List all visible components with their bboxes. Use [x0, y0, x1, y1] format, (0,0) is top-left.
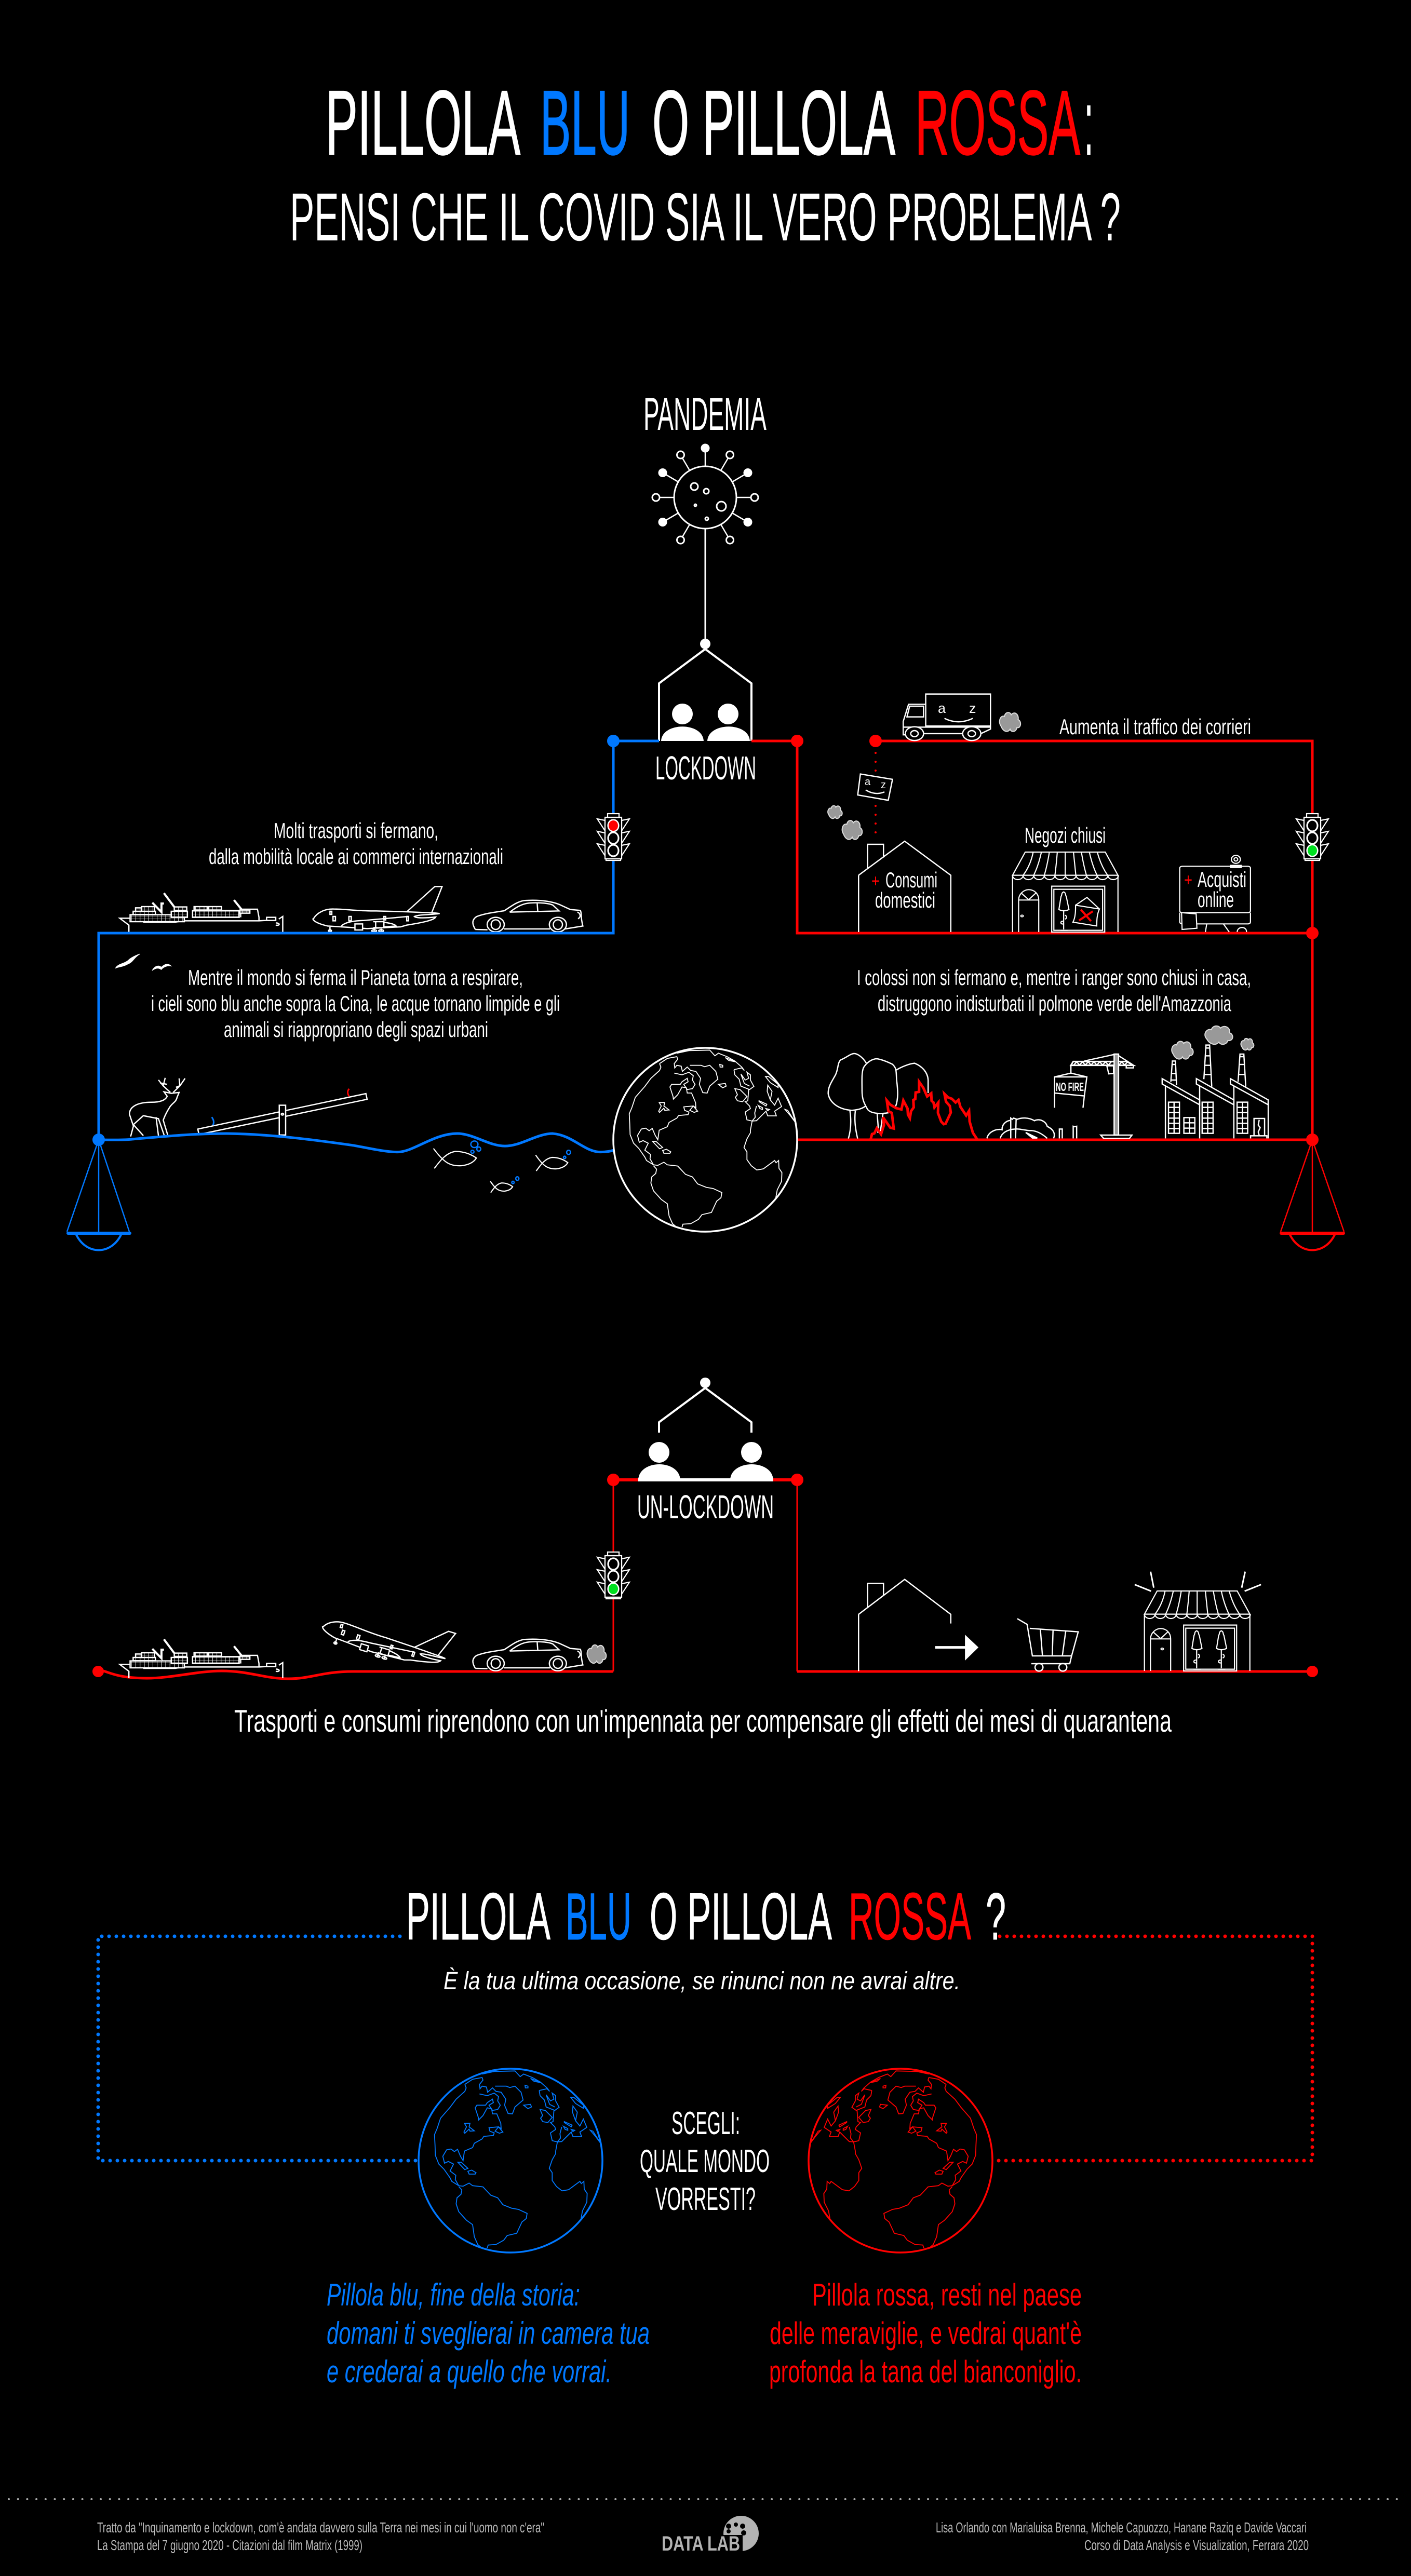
text: colossi: distruggono indisturbati il polmone verde dell'Amazzonia — [878, 991, 1231, 1016]
heading: blue or red pill: PILLOLA — [406, 1880, 550, 1954]
icon: house with arrow — [858, 1580, 977, 1671]
title: O PILLOLA — [652, 72, 895, 174]
icon: bush and stumps — [987, 1118, 1077, 1138]
icon: red scale — [1281, 1140, 1344, 1250]
title — [326, 72, 1093, 174]
icon: factories — [1162, 1026, 1268, 1138]
footer: source: Tratto da "Inquinamento e lockdown, com'è andata davvero sulla Terra nei mesi in cui l'uomo non c'era" — [97, 2519, 544, 2535]
text: couriers: Aumenta il traffico dei corrieri — [1059, 714, 1251, 739]
text: home consumption: + — [871, 871, 880, 891]
text: home consumption: Consumi — [885, 868, 937, 892]
text: home consumption — [871, 868, 937, 912]
text: transports — [209, 818, 503, 869]
text: colossi — [857, 965, 1251, 1016]
icon: birds — [115, 954, 171, 970]
icon: lockdown house with people — [659, 639, 751, 741]
fire — [871, 1082, 977, 1139]
connector: virus to house — [704, 529, 706, 644]
icon: closed shop — [1013, 852, 1119, 932]
text: transports: dalla mobilità locale ai commerci internazionali — [209, 844, 503, 869]
text: red pill: profonda la tana del bianconiglio. — [769, 2354, 1082, 2389]
footer: logo: DATA LAB — [662, 2532, 740, 2555]
traffic light: green — [597, 1552, 629, 1599]
icons: house smoke — [828, 806, 862, 840]
heading: blue or red pill — [406, 1880, 1006, 1954]
icon: house — [858, 841, 951, 932]
icon: computer — [1180, 855, 1251, 932]
icon: fish — [434, 1141, 571, 1193]
heading: un-lockdown: UN-LOCKDOWN — [637, 1488, 774, 1526]
text: planet breathes: Mentre il mondo si ferma il Pianeta torna a respirare, — [188, 965, 523, 990]
text: red pill: Pillola rossa, resti nel paese — [812, 2277, 1082, 2312]
blue water line — [103, 1134, 614, 1193]
icon: delivery truck — [903, 694, 990, 740]
text: online purchases: online — [1198, 887, 1234, 912]
traffic light: green — [1296, 814, 1328, 860]
icon: burning trees — [828, 1054, 977, 1139]
title: BLU — [540, 72, 630, 174]
text: red pill — [769, 2277, 1082, 2389]
icon: package — [858, 774, 893, 800]
icons: transports restart — [120, 1596, 606, 1678]
title: PILLOLA — [326, 72, 520, 174]
icon: seesaw — [198, 1089, 367, 1135]
text: blue pill: domani ti sveglierai in camera tua — [327, 2316, 650, 2351]
text: shops closed: Negozi chiusi — [1025, 823, 1106, 847]
icon: truck smoke — [1000, 712, 1020, 732]
icon: red earth mirrored — [809, 2069, 992, 2253]
icon: cart — [1017, 1619, 1078, 1671]
icon: no fire sign and crane: NO FIRE — [1056, 1080, 1084, 1094]
text: planet breathes: animali si riappropriano degli spazi urbani — [224, 1017, 488, 1042]
icon: package: a — [865, 776, 871, 788]
text: choose: QUALE MONDO — [640, 2143, 770, 2179]
text: online purchases — [1184, 867, 1246, 912]
text: last chance: È la tua ultima occasione, se rinunci non ne avrai altre. — [444, 1967, 960, 1995]
icon: package: z — [881, 779, 886, 791]
traffic light: red — [597, 814, 629, 860]
dotted frame: red — [996, 1936, 1312, 2161]
text: choose — [640, 2106, 770, 2217]
icons: transports stopped — [120, 886, 583, 932]
text: blue pill: e crederai a quello che vorrai. — [327, 2354, 612, 2389]
dotted delivery line — [875, 753, 877, 841]
truck lettering: z — [969, 700, 976, 716]
text: choose: VORRESTI? — [655, 2181, 756, 2217]
title: ROSSA — [915, 72, 1080, 174]
text: blue pill: Pillola blu, fine della storia: — [327, 2277, 580, 2312]
footer: logo — [660, 2516, 759, 2555]
text: : — [1084, 72, 1093, 174]
heading: blue or red pill: BLU — [566, 1880, 631, 1954]
heading: pandemia: PANDEMIA — [643, 388, 767, 440]
icon: earth — [613, 1048, 797, 1232]
text: planet breathes: i cieli sono blu anche sopra la Cina, le acque tornano limpide e gli — [151, 991, 560, 1016]
truck lettering: a — [938, 700, 946, 716]
icon: blue earth — [419, 2069, 602, 2253]
footer: source — [97, 2519, 544, 2553]
text: home consumption: domestici — [875, 888, 935, 912]
footer divider — [9, 2498, 1402, 2500]
truck lettering — [938, 700, 976, 716]
icon: no fire sign and crane — [1055, 1054, 1133, 1138]
heading: blue or red pill: O PILLOLA — [650, 1880, 832, 1954]
dotted frame: blue — [98, 1936, 416, 2161]
un-lockdown: people — [638, 1378, 773, 1480]
icon: virus — [652, 444, 758, 544]
icon: deer — [129, 1078, 185, 1137]
heading: blue or red pill: ROSSA — [849, 1880, 971, 1954]
icon: blue scale — [67, 1140, 130, 1250]
un-lockdown red path — [92, 1474, 1318, 1679]
text: choose: SCEGLI: — [671, 2106, 740, 2141]
blue lockdown path — [92, 735, 659, 1146]
text: online purchases: Acquisti — [1198, 867, 1246, 892]
footer: credits: Corso di Data Analysis e Visualization, Ferrara 2020 — [1084, 2537, 1309, 2553]
red lockdown path — [751, 735, 1319, 1146]
footer: source: La Stampa del 7 giugno 2020 - Citazioni dal film Matrix (1999) — [97, 2537, 362, 2553]
text: red pill: delle meraviglie, e vedrai quant'è — [770, 2316, 1082, 2351]
heading: blue or red pill: ? — [986, 1880, 1006, 1954]
heading: lockdown: LOCKDOWN — [655, 749, 756, 787]
text: transports: Molti trasporti si fermano, — [274, 818, 438, 843]
text: planet breathes — [151, 965, 560, 1042]
footer: credits — [936, 2519, 1309, 2553]
icon: reopened shop — [1135, 1572, 1261, 1671]
text: blue pill — [327, 2277, 650, 2389]
text: online purchases: + — [1184, 870, 1192, 890]
